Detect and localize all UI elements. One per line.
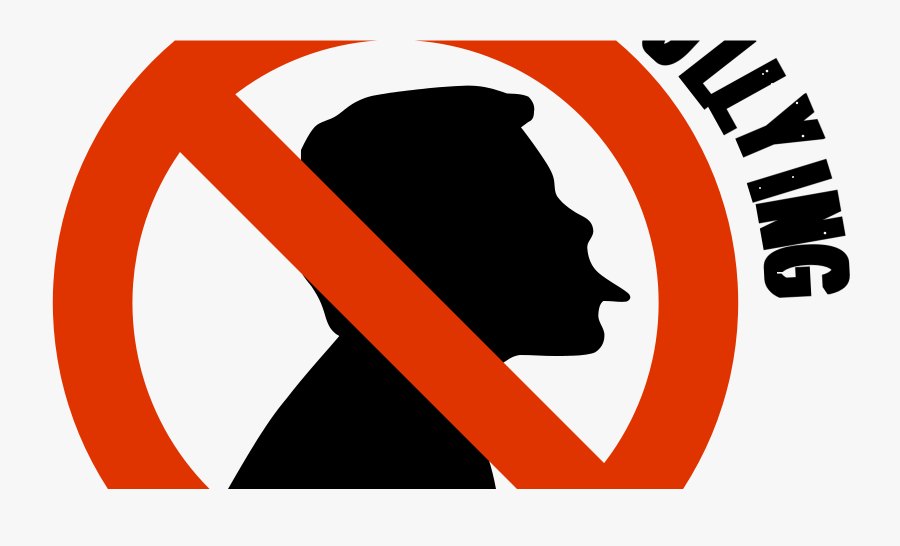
prohibition ring [53, 40, 738, 489]
letter L: L [683, 48, 816, 143]
prohibition diagonal bar [160, 74, 630, 489]
letter L: L [660, 12, 786, 121]
icon: head silhouette with tongue out [228, 86, 630, 489]
letter G: G [740, 245, 873, 297]
infographic canvas: no bullying sign [52, 40, 850, 489]
curved heading: BULLYING [642, 40, 850, 298]
letter Y: Y [709, 88, 846, 176]
letter N: N [732, 188, 869, 252]
letter I: I [724, 154, 855, 208]
